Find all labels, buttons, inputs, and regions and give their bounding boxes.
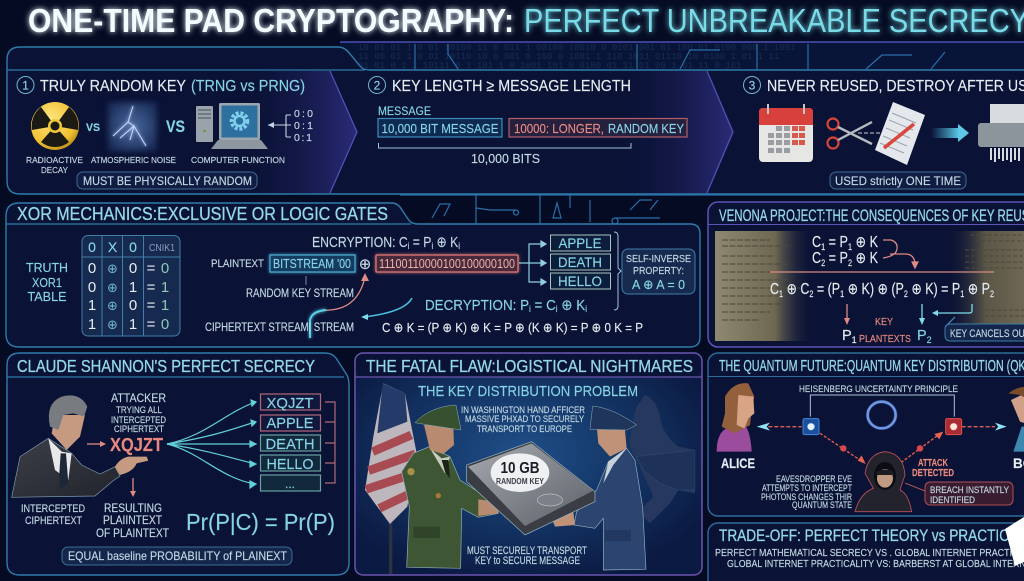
panel: Claude Shannon: [7, 353, 349, 575]
combined formula: ⊕ K) ⊕ (P: [844, 281, 904, 298]
output words: [550, 235, 610, 289]
decryption formula: ⊕ K: [558, 297, 585, 314]
truth table: 1: [88, 297, 96, 314]
self-inverse derivation: C ⊕ K = (P ⊕ K) ⊕ K = P ⊕ (K ⊕ K) = P ⊕ 0 K = P: [382, 320, 643, 335]
icon: computer: [196, 103, 268, 149]
truth table: 1: [129, 279, 137, 296]
combining arrow: [883, 240, 918, 268]
candidate plaintext boxes: XQJZT: [266, 395, 314, 412]
encryption formula: ENCRYPTION: C: [312, 234, 429, 251]
combined formula: 2: [809, 289, 813, 299]
transport caption: KEY to SECURE MESSAGE: [475, 555, 580, 567]
candidate plaintext boxes: APPLE: [266, 415, 314, 432]
eavesdropper caption: EAVESDROPPER EVE: [776, 474, 852, 484]
principle 3 heading: 3: [749, 78, 756, 92]
eavesdropper caption: PHOTONS CHANGES THIR: [761, 492, 852, 502]
plaintext label: PLAINTEXT: [211, 258, 264, 270]
heading: CLAUDE SHANNON'S PERFECT SECRECY: [17, 356, 315, 376]
truth table: =: [147, 260, 156, 277]
decryption formula: = C: [531, 297, 556, 314]
encryption formula: i: [431, 241, 433, 251]
panel: the quantum future: [708, 353, 1024, 516]
key reuse equations: 1: [821, 242, 825, 252]
arrow and bit bracket: 0:1: [294, 120, 313, 132]
washington caption: TRANSPORT TO EUROPE: [477, 424, 572, 435]
truth table: =: [147, 297, 156, 314]
key reuse equations: 1: [848, 242, 852, 252]
down arrow: [130, 478, 136, 497]
arrow: [931, 124, 969, 142]
illustration: hard drive with 10 GB random key: 10 GB: [500, 460, 540, 477]
arrow to ciphertext: [87, 441, 106, 447]
result arrows: [844, 304, 972, 327]
archival document right: [945, 231, 1024, 341]
icon: scissors: [828, 118, 880, 148]
fan-out arrows: [167, 400, 256, 488]
resulting plaintext caption: PLAIINTEXT: [103, 515, 162, 527]
resulting plaintext caption: OF PLAINTEXT: [96, 528, 169, 540]
truth table label: TRUTH: [26, 260, 68, 275]
washington caption: MASSIVE PHXAD TO SECURELY: [465, 414, 585, 425]
output words: APPLE: [558, 235, 602, 251]
principle 1 heading: [17, 76, 305, 95]
combined formula: ⊕ K) = P: [908, 281, 960, 298]
length bracket: [378, 143, 631, 166]
heading: THE FATAL FLAW:LOGISTICAL NIGHTMARES: [366, 356, 693, 376]
principle 1 heading: (TRNG vs PRNG): [191, 78, 305, 95]
key reuse equations: ⊕ K: [852, 234, 879, 251]
icon captions: DECAY: [41, 165, 68, 175]
P2 result: P: [917, 328, 927, 344]
truth table: 0: [88, 279, 96, 296]
output arrows: [519, 241, 546, 285]
illustration: Claude Shannon pointing: [12, 395, 148, 497]
subheading: THE KEY DISTRIBUTION PROBLEM: [418, 383, 638, 400]
key stream arrow: [282, 273, 412, 338]
attacker caption: ATTACKER: [111, 391, 166, 405]
key box: RANDOM KEY: [608, 121, 684, 136]
illustration: American flag: [365, 383, 417, 574]
key reuse equations: [812, 234, 879, 268]
combined formula: 2: [904, 289, 908, 299]
decryption formula: i: [585, 304, 587, 314]
divider line: [770, 271, 994, 273]
truth table: 0: [161, 260, 169, 277]
icon: calendar: [759, 104, 813, 162]
combined formula: = (P: [813, 281, 840, 298]
self-inverse property callout: A ⊕ A = 0: [632, 277, 685, 292]
truth table: 0: [88, 239, 96, 255]
label: Alice: ALICE: [721, 456, 755, 471]
key box: 10000: LONGER,: [514, 121, 604, 136]
illustration: Bob: [1008, 387, 1024, 452]
truth table: ⊕: [107, 261, 118, 276]
decryption formula: i: [529, 304, 531, 314]
truth table: =: [147, 279, 156, 296]
callout: equal baseline probability: EQUAL baseline PROBABILITY of PLAINEXT: [68, 549, 288, 563]
illustration: air force officer: [552, 406, 646, 570]
key reuse equations: 2: [848, 258, 852, 268]
encryption formula: ⊕ K: [433, 234, 458, 251]
combined formula: 1: [840, 289, 844, 299]
eavesdropper caption: ATTEMPTS TO INTERCEPT: [762, 483, 852, 493]
xor symbol: ⊕: [359, 256, 371, 273]
attack detected: [912, 457, 954, 479]
title: ONE-TIME PAD CRYPTOGRAPHY:: [28, 2, 514, 39]
combined formula: 1: [960, 289, 964, 299]
truth table: ⊕: [107, 317, 118, 332]
circuit backdrop between top and second row: [400, 195, 1024, 224]
icon: lightning: [108, 102, 157, 151]
label: intercepted ciphertext: CIPHERTEXT: [25, 515, 82, 527]
illustration: hard drive with 10 GB random key: [467, 442, 595, 535]
truth table: [82, 236, 180, 336]
combined formula: ⊕ C: [783, 281, 809, 298]
P1 result: P: [842, 328, 852, 344]
encryption formula: i: [408, 241, 409, 251]
decryption formula: DECRYPTION: P: [425, 297, 541, 314]
message bit box: 10,000 BIT MESSAGE: [382, 121, 499, 136]
attacker caption: TRYING ALL: [116, 405, 162, 416]
arrow and bit bracket: 0:0: [294, 108, 313, 120]
truth table: 1: [161, 279, 169, 296]
encryption formula: = P: [409, 234, 431, 251]
heading: XOR MECHANICS:EXCLUSIVE OR LOGIC GATES: [17, 204, 388, 224]
principle 2 heading: KEY LENGTH ≥ MESSAGE LENGTH: [392, 78, 631, 95]
panel: the fatal flaw: [355, 353, 702, 575]
principle 1 heading: 1: [22, 78, 29, 92]
panel: three non-negotiable principles: [7, 42, 1024, 194]
arrow and bit bracket: [268, 108, 313, 144]
illustration: map of Europe: [630, 395, 695, 523]
washington caption: [461, 405, 585, 435]
resulting plaintext caption: RESULTING: [104, 503, 162, 515]
label: intercepted ciphertext: INTERCEPTED: [21, 503, 85, 515]
truth table: =: [147, 316, 156, 333]
attacker caption: [111, 391, 166, 435]
key reuse equations: = P: [825, 250, 848, 267]
combined formula: C: [770, 281, 781, 298]
truth table: 1: [161, 297, 169, 314]
eavesdropper caption: [761, 474, 852, 510]
combined formula: 1: [779, 289, 783, 299]
icon captions: COMPUTER FUNCTION: [191, 155, 285, 165]
key plaintexts label: KEY: [875, 316, 893, 328]
key reuse equations: 2: [821, 258, 825, 268]
candidate plaintext boxes: DEATH: [266, 436, 314, 453]
attack detected: DETECTED: [912, 467, 954, 479]
panel: trade-off: [708, 523, 1024, 581]
archival document left: [715, 231, 815, 341]
truth table: 0: [129, 260, 137, 277]
message label: MESSAGE: [378, 104, 431, 118]
output words: HELLO: [558, 273, 602, 289]
truth table: 1: [129, 316, 137, 333]
decryption formula: i: [556, 304, 558, 314]
panel: XOR mechanics: [6, 203, 700, 347]
white corner mark: [1005, 517, 1024, 566]
self-inverse property callout: PROPERTY:: [633, 265, 684, 277]
callout: breach instantly identified: BREACH INSTANTLY: [930, 485, 1010, 496]
P2 result: 2: [927, 335, 932, 345]
key reuse equations: ⊕ K: [852, 250, 879, 267]
arrow and bit bracket: 0:1: [294, 132, 312, 144]
key stream box: 11100110000100100000100: [379, 256, 515, 271]
icon captions: [26, 155, 285, 175]
ciphertext stream label: CIPHERTEXT STREAM| STREAM: [205, 322, 354, 334]
truth table: 1: [88, 316, 96, 333]
key reuse equations: C: [812, 250, 823, 267]
illustration: army officer: [402, 405, 498, 568]
random key stream label: RANDOM KEY STREAM: [246, 288, 354, 300]
candidate plaintext boxes: HELLO: [266, 456, 314, 473]
callout: breach instantly identified: [905, 482, 1013, 506]
truth table: 0: [161, 316, 169, 333]
truth table label: TABLE: [28, 289, 67, 304]
chevron divider 2: [610, 71, 733, 193]
self-inverse property callout: [622, 249, 695, 294]
panel: three non-negotiable principles: 01 01 0 1 1 10111 0 1 101 1 0 1001 101 0 0180 01 11 01 00 1 01 11 0 101: [358, 61, 741, 71]
truth table: CNIK1: [149, 243, 175, 254]
vs label: VS: [166, 117, 185, 136]
ciphertext XQJZT: XQJZT: [110, 435, 163, 455]
illustration: hard drive with 10 GB random key: RANDOM KEY: [496, 477, 545, 486]
truth table: 0: [129, 239, 137, 255]
icon: radioactive symbol: [31, 102, 79, 150]
panel: three non-negotiable principles: 11 00 01 1 0 01 10110 10 0 001 0 100 0 1001 1 110 1011 01110 10 0100 1 01 1 11: [358, 52, 779, 62]
callout: breach instantly identified: IDENTIFIED: [930, 495, 975, 506]
key cancels callout: [945, 324, 1024, 341]
key reuse equations: C: [812, 234, 823, 251]
random key stream label: [246, 276, 354, 300]
title: [28, 2, 1024, 39]
washington caption: IN WASHINGTON HAND AFFICER: [461, 405, 585, 416]
truth table: ⊕: [107, 280, 118, 295]
chevron divider 1: [230, 71, 357, 193]
grouping bracket: [325, 402, 335, 483]
attacker caption: INTERCEPTED: [111, 415, 166, 426]
icon: shredder: [978, 104, 1024, 162]
principle 1 heading: TRULY RANDOM KEY: [40, 78, 186, 95]
attack detected: ATTACK: [918, 457, 948, 469]
P1 result: 1: [852, 335, 857, 345]
truth table: X: [108, 239, 118, 255]
vs label: VS: [86, 122, 100, 134]
transport caption: MUST SECURELY TRANSPORT: [467, 545, 587, 557]
callout: must be physically random: MUST BE PHYSICALLY RANDOM: [83, 174, 252, 188]
length bracket: 10,000 BITS: [471, 152, 540, 166]
truth table: 0: [129, 297, 137, 314]
illustration: Eve in hood: [855, 452, 912, 512]
encryption formula: i: [458, 241, 460, 251]
truth table label: [26, 260, 68, 304]
key plaintexts label: PLANTEXTS: [859, 333, 911, 345]
transport caption: [467, 545, 587, 567]
truth table: ⊕: [107, 298, 118, 313]
description: [715, 548, 1024, 570]
callout: used strictly one time: USED strictly ONE TIME: [835, 174, 961, 188]
truth table label: XOR1: [32, 275, 62, 290]
brace: [614, 232, 621, 310]
illustration: Alice: [717, 383, 754, 452]
icon captions: RADIOACTIVE: [26, 155, 83, 165]
key plaintexts label: [859, 316, 911, 345]
truth table: 0: [88, 260, 96, 277]
probability formula: Pr(P|C) = Pr(P): [186, 509, 335, 535]
self-inverse property callout: SELF-INVERSE: [626, 253, 691, 265]
combined formula: 2: [990, 289, 994, 299]
panel: Venona project: [708, 202, 1024, 347]
panel: three non-negotiable principles: 10 01 01 1 0 01 10100 11 0 011 1 00100 10010 0 0101 001 01 100 01 0100 000 1 1001: [358, 43, 795, 53]
key reuse equations: = P: [825, 234, 848, 251]
plaintext bitstream box: BITSTREAM '00: [273, 256, 351, 271]
eavesdrop paths: [820, 432, 943, 464]
eavesdropper caption: QUANTUM STATE: [792, 500, 852, 510]
quantum channel: [757, 395, 1007, 435]
combined formula: ⊕ P: [964, 281, 990, 298]
Heisenberg label: HEISENBERG UNCERTAINTY PRINCIPLE: [799, 384, 958, 395]
candidate plaintext boxes: ...: [285, 477, 295, 491]
resulting plaintext caption: [96, 503, 169, 540]
principle 2 heading: 2: [374, 78, 381, 92]
attacker caption: CIPHERTEXT: [114, 424, 164, 435]
output words: DEATH: [558, 254, 602, 270]
icon: document and pencil: [875, 102, 925, 165]
label: intercepted ciphertext: [21, 503, 85, 527]
candidate plaintext boxes: [260, 394, 320, 491]
key box: [509, 118, 687, 137]
icon captions: ATMOSPHERIC NOISE: [91, 155, 176, 165]
